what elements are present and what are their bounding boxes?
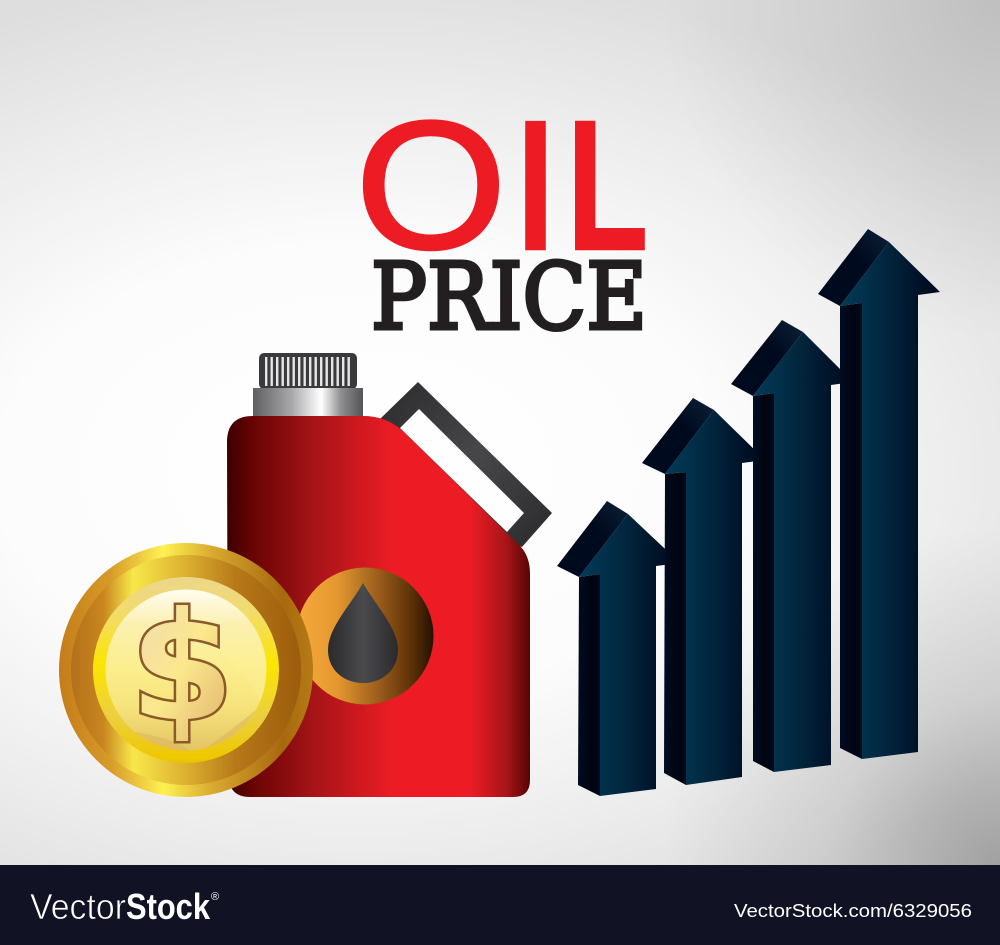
icon: oil drop: [328, 583, 398, 683]
dollar sign: $: [130, 581, 234, 755]
title word: OIL: I: [510, 82, 561, 288]
icon: gold dollar coin: [59, 543, 313, 797]
chart: rising arrows: [557, 229, 940, 796]
footer logo: ®: [211, 891, 219, 903]
canister cap: [259, 353, 357, 389]
title word: OIL: O: [355, 83, 507, 287]
canister handle: [380, 382, 552, 547]
title: [355, 82, 648, 350]
footer logo: Stock: [126, 886, 211, 927]
icon: oil canister: [227, 353, 552, 797]
coin outer rim: [59, 543, 313, 797]
arrow 1: [557, 501, 680, 796]
title word: OIL: L: [567, 82, 648, 290]
footer image id: VectorStock.com/6329056: [734, 901, 972, 921]
title word: PRICE: PRICE: [371, 244, 647, 350]
footer logo: [30, 886, 219, 927]
coin inner rim: [71, 555, 301, 785]
footer logo: Vector: [30, 886, 126, 927]
canister neck: [253, 388, 363, 418]
arrow 4: [818, 229, 940, 759]
canister label circle: [296, 568, 434, 704]
coin face: [106, 590, 266, 750]
title word: OIL: [355, 82, 648, 290]
footer bar: [0, 865, 1000, 945]
canister body: [227, 416, 530, 797]
coin yellow ring: [93, 577, 279, 763]
arrow 3: [731, 320, 853, 772]
arrow 2: [642, 398, 765, 785]
